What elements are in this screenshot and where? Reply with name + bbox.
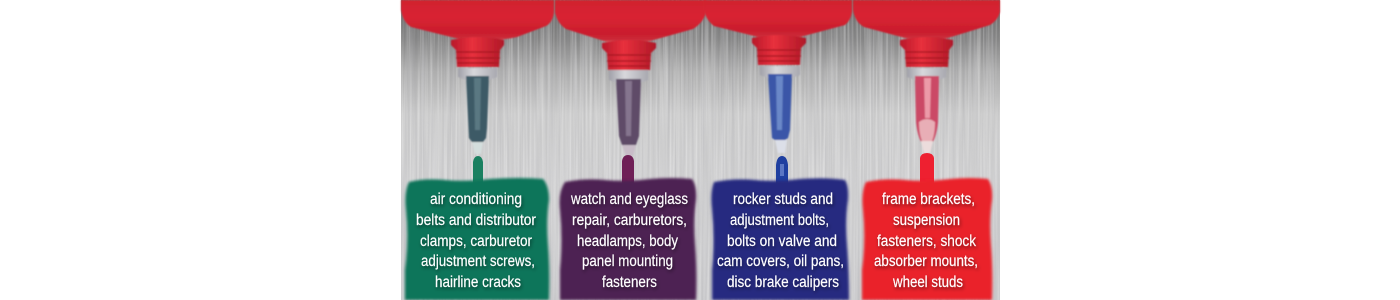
applicator bottle: red: [853, 0, 1000, 153]
label: green: clamps, carburetor: [420, 233, 532, 250]
label: red: wheel studs: [892, 274, 963, 291]
brushed metal background: [401, 0, 1000, 300]
label: red: [874, 191, 978, 291]
label: purple: watch and eyeglass: [570, 191, 688, 208]
applicator bottle: green: [401, 0, 554, 154]
label: purple: panel mounting: [582, 253, 673, 270]
label: blue: adjustment bolts,: [730, 212, 829, 229]
sealant panel: purple: [560, 155, 696, 300]
applicator bottle: purple: [555, 0, 706, 156]
label: blue: bolts on valve and: [727, 233, 837, 250]
label: green: belts and distributor: [416, 212, 536, 229]
label: blue: disc brake calipers: [727, 274, 839, 291]
label: red: frame brackets,: [882, 191, 975, 208]
label: purple: fasteners: [602, 274, 657, 291]
label: blue: [717, 191, 844, 291]
label: purple: [570, 191, 688, 291]
label: green: hairline cracks: [435, 274, 521, 291]
label: red: absorber mounts,: [874, 253, 978, 270]
sealant panel: red: [862, 153, 992, 300]
label: green: adjustment screws,: [421, 253, 535, 270]
label: green: [416, 191, 536, 291]
label: purple: repair, carburetors,: [572, 212, 687, 229]
label: purple: headlamps, body: [577, 233, 678, 250]
label: blue: cam covers, oil pans,: [717, 253, 844, 270]
label: red: suspension: [893, 212, 960, 229]
label: blue: rocker studs and: [733, 191, 833, 208]
sealant panel: green: [405, 156, 549, 300]
label: red: fasteners, shock: [877, 233, 976, 250]
label: green: air conditioning: [430, 191, 522, 208]
sealant panel: blue: [711, 156, 849, 300]
applicator bottle: blue: [704, 0, 852, 153]
